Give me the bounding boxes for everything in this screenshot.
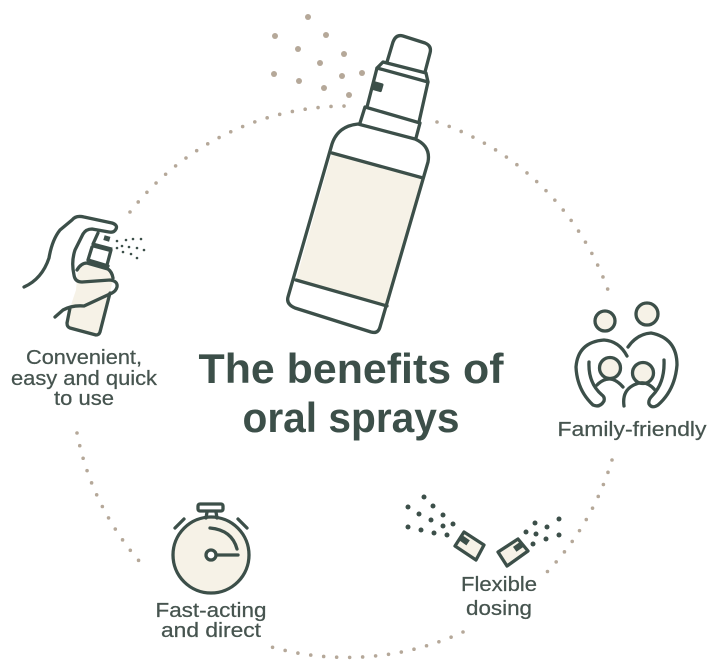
dotted circle [77, 106, 612, 657]
title [198, 345, 505, 441]
label: fast-acting: and direct [161, 620, 261, 642]
icon: family [576, 303, 677, 407]
label: family-friendly: Family-friendly [558, 419, 706, 441]
icon: flexible dosing [406, 494, 562, 566]
icon: hand holding spray [24, 216, 145, 335]
spray particles above bottle [271, 14, 365, 98]
label: fast-acting: Fast-acting [156, 600, 266, 622]
label: flexible dosing: Flexible [461, 574, 537, 596]
label: convenient [11, 347, 158, 410]
icon: large spray bottle [288, 36, 430, 332]
title: The benefits of [198, 345, 505, 392]
title: oral sprays [242, 394, 460, 441]
label: fast-acting [156, 600, 266, 642]
label: convenient: easy and quick [11, 368, 158, 390]
label: convenient: to use [54, 388, 114, 410]
label: flexible dosing [461, 574, 537, 620]
label: convenient: Convenient, [26, 347, 142, 369]
label: flexible dosing: dosing [466, 598, 532, 620]
icon: stopwatch [173, 504, 249, 593]
